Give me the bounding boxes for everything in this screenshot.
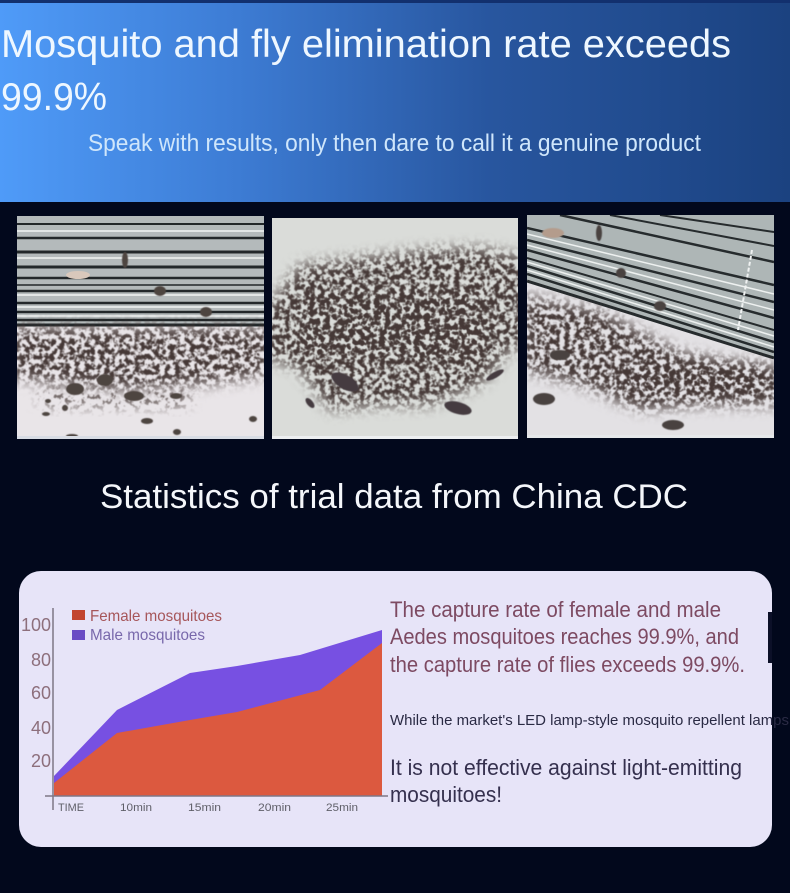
- legend: Male mosquitoes: [90, 627, 205, 644]
- legend: Female mosquitoes: [90, 608, 222, 625]
- x axis labels: 20min: [258, 802, 291, 814]
- x axis labels: [58, 802, 358, 814]
- y axis labels: 60: [31, 683, 51, 703]
- conclusion text: mosquitoes!: [390, 782, 502, 807]
- legend: [72, 608, 222, 644]
- capture rate text: The capture rate of female and male: [390, 597, 721, 622]
- x axis labels: TIME: [58, 802, 84, 814]
- capture rate text: the capture rate of flies exceeds 99.9%.: [390, 652, 745, 677]
- x axis labels: 25min: [326, 802, 358, 814]
- y axis labels: 80: [31, 650, 51, 670]
- photo: insects below grille, left: [10, 216, 270, 439]
- subtitle: Speak with results, only then dare to call it a genuine product: [88, 130, 701, 157]
- y axis labels: [21, 615, 51, 771]
- y axis labels: 40: [31, 718, 51, 738]
- panel: chart and explanation card: [19, 571, 789, 847]
- photo: insects below tilted grille, right: [522, 215, 784, 438]
- title: 99.9%: [1, 76, 107, 119]
- conclusion text: [390, 755, 742, 807]
- capture rate text: [390, 597, 745, 677]
- female mosquitoes area: [54, 643, 382, 796]
- male mosquitoes area: [54, 630, 382, 796]
- axes: [45, 608, 388, 810]
- x axis labels: 10min: [120, 802, 152, 814]
- area chart: [21, 608, 388, 814]
- capture rate text: Aedes mosquitoes reaches 99.9%, and: [390, 624, 739, 649]
- photo: pile of insects, centre: [262, 218, 527, 439]
- y axis labels: 100: [21, 615, 51, 635]
- conclusion text: It is not effective against light-emitting: [390, 755, 742, 780]
- x axis labels: 15min: [188, 802, 221, 814]
- title: Mosquito and fly elimination rate exceeds: [1, 23, 731, 66]
- section heading: Statistics of trial data from China CDC: [100, 478, 688, 516]
- header banner: [0, 0, 790, 202]
- LED lamp comparison text: While the market's LED lamp-style mosquito repellent lamps: [390, 712, 789, 729]
- title: [1, 23, 731, 119]
- y axis labels: 20: [31, 751, 51, 771]
